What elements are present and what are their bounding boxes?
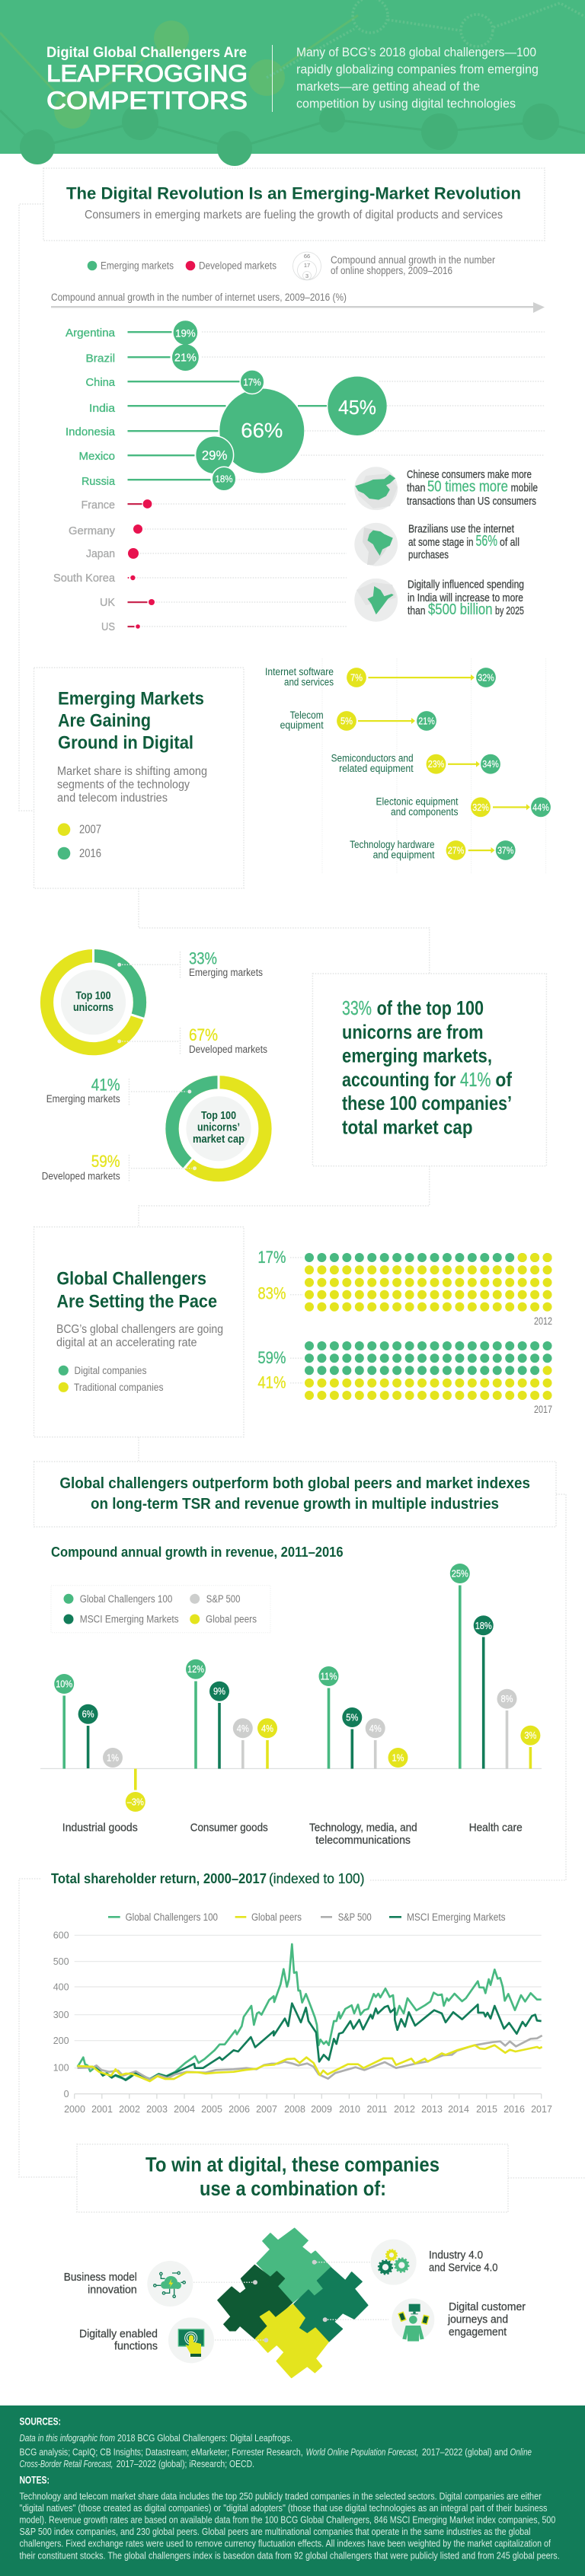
label: market cap developed 59% (42, 1152, 120, 1182)
x-axis labels: 2006 (229, 2104, 250, 2115)
legend: markets: Compound annual growth in the number (331, 254, 495, 266)
emerging country labels: India (89, 402, 116, 415)
legend: markets: 17 (304, 262, 310, 269)
y-axis labels (53, 1930, 69, 2099)
emerging country labels: China (85, 376, 116, 389)
label: unicorns developed 67% (189, 1025, 267, 1055)
donut chart: unicorns market cap (129, 1063, 284, 1194)
panel: outperform heading (34, 1462, 556, 1527)
legend: company types: Traditional companies (74, 1382, 164, 1393)
row: electronic equipment: 44% (532, 802, 549, 813)
row: semiconductors: Semiconductors and (331, 753, 414, 764)
row: electronic equipment: Electonic equipment (376, 796, 459, 808)
group: technology media telecom: Technology, media, and (309, 1822, 417, 1835)
icon: person with devices (392, 2298, 434, 2342)
group: industrial goods: 10% (56, 1679, 72, 1690)
header background network (0, 0, 585, 166)
callout: digital customer journeys (323, 2298, 526, 2342)
panel: emerging markets gaining ground (34, 668, 244, 888)
description: segments of the technology (57, 779, 190, 792)
legend: revenue growth: Global peers (206, 1614, 257, 1625)
label: unicorns developed 67%: Developed markets (189, 1044, 267, 1055)
x-axis labels: 2007 (256, 2104, 277, 2115)
emerging country labels: Argentina (66, 327, 116, 340)
callout: business model innovation (64, 2261, 257, 2307)
puzzle piece: yellow (256, 2304, 328, 2377)
group: health care: 3% (524, 1730, 536, 1741)
x-axis labels: 2009 (311, 2104, 332, 2115)
dot chart: 2012 (257, 1248, 552, 1327)
description (57, 765, 207, 805)
donut chart: top 100 unicorns: unicorns (73, 1002, 113, 1014)
label: market cap emerging 41%: Emerging markets (46, 1093, 120, 1105)
panel: unicorn statement: total market cap (342, 1115, 472, 1138)
callout: digital customer journeys: engagement (449, 2326, 507, 2338)
row: technology hardware: Technology hardware (350, 839, 435, 850)
emerging country labels: Brazil (85, 352, 115, 365)
emerging country labels: Indonesia (66, 426, 116, 438)
legend: revenue growth: MSCI Emerging Markets (80, 1614, 179, 1625)
group: consumer goods: 4% (237, 1723, 249, 1734)
row: telecom equipment: Telecom (290, 709, 324, 721)
panel: unicorn statement: these 100 companies’ (342, 1092, 512, 1114)
group: consumer goods: Consumer goods (190, 1822, 268, 1835)
sources: SOURCES: (20, 2416, 61, 2428)
callout: digitally enabled functions (79, 2317, 268, 2363)
row: technology hardware: and equipment (373, 850, 435, 861)
puzzle piece: medium green (294, 2268, 368, 2342)
axis arrow: internet user growth: Compound annual growth in the number of internet users, 2009–2016 (%) (51, 292, 347, 303)
group: technology media telecom (309, 1666, 417, 1847)
x-axis labels: 2016 (503, 2104, 525, 2115)
panel: global challengers pace: Are Setting the Pace (56, 1292, 217, 1312)
panel: combination heading (77, 2144, 508, 2212)
x-axis labels: 2005 (201, 2104, 222, 2115)
developed country labels: South Korea (53, 572, 116, 585)
legend: markets (88, 252, 495, 280)
heading: Emerging Markets (58, 689, 204, 709)
group: industrial goods (54, 1674, 145, 1835)
panel: combination heading: use a combination of: (200, 2177, 386, 2200)
callout: Brazil purchases (354, 523, 519, 566)
y-axis labels: 100 (53, 2063, 69, 2074)
label: unicorns emerging 33%: Emerging markets (189, 967, 263, 978)
heading: Are Gaining (58, 711, 151, 732)
label: market cap developed 59%: Developed markets (42, 1171, 120, 1182)
callout: Brazil purchases: at some stage in (408, 537, 474, 549)
sources (20, 2416, 532, 2469)
callout: India spending: Digitally influenced spending (408, 579, 524, 591)
legend: years: 2016 (79, 847, 101, 860)
callout: digitally enabled functions: functions (114, 2341, 158, 2353)
lollipop chart: revenue growth (40, 1564, 542, 1847)
sources: 2018 BCG Global Challengers: Digital Leapfrogs. (117, 2432, 292, 2444)
panel: unicorn statement (312, 974, 546, 1166)
sources: Cross-Border Retail Forecast, (20, 2458, 113, 2469)
group: technology media telecom: 5% (346, 1713, 358, 1723)
icon: gears (371, 2240, 417, 2285)
dot chart: 2012: 83% (257, 1284, 286, 1303)
data lines (78, 1944, 542, 2081)
header banner (0, 0, 585, 166)
sources: Data in this infographic from (20, 2432, 115, 2444)
legend: markets: 66 (304, 253, 310, 260)
callout: digitally enabled functions: Digitally enabled (79, 2328, 158, 2340)
emerging market lines (128, 331, 327, 480)
callout: India spending: in India will increase to more (408, 592, 523, 604)
callout: digital customer journeys: journeys and (447, 2314, 508, 2326)
developed country labels (53, 499, 116, 633)
panel: global challengers pace: Global Challengers (56, 1268, 206, 1289)
callout: Brazil purchases: Brazilians use the internet (408, 524, 514, 536)
x-axis labels: 2008 (284, 2104, 305, 2115)
puzzle piece: light green (257, 2228, 331, 2302)
panel: digital revolution heading (43, 168, 545, 241)
legend: markets: Emerging markets (101, 260, 174, 271)
header title: LEAPFROGGING (46, 59, 248, 87)
puzzle piece: dark green (218, 2265, 292, 2338)
panel: unicorn statement: 41% (460, 1068, 491, 1091)
row: semiconductors: related equipment (339, 763, 414, 774)
heading: total shareholder return: (indexed to 100) (269, 1870, 364, 1886)
callout: India spending: than (408, 605, 425, 617)
developed country labels: US (101, 620, 115, 633)
callout: India spending: $500 billion (428, 601, 492, 618)
row: internet software: 32% (478, 673, 494, 684)
label: unicorns developed 67%: 67% (189, 1025, 218, 1044)
donut chart: top 100 unicorns (47, 947, 180, 1055)
legend: company types (59, 1365, 164, 1393)
x-axis labels: 2001 (91, 2104, 113, 2115)
heading: revenue growth: Compound annual growth in revenue, 2011–2016 (51, 1544, 344, 1560)
legend: shareholder return: MSCI Emerging Markets (407, 1911, 506, 1923)
group: industrial goods: 6% (82, 1709, 94, 1720)
group: technology media telecom: 11% (320, 1672, 337, 1682)
connectors (19, 204, 585, 2178)
callout: Brazil purchases: of all (500, 537, 519, 549)
panel: outperform heading: on long-term TSR and revenue growth in multiple industries (91, 1495, 499, 1513)
legend: shareholder return: Global peers (251, 1911, 302, 1923)
header title (46, 45, 248, 114)
bubble values: 17% (243, 377, 261, 388)
emerging country labels (66, 327, 116, 488)
developed country labels: France (81, 499, 115, 512)
x-axis labels (64, 2104, 552, 2115)
group: health care: 8% (501, 1694, 513, 1704)
callout: India spending: by 2025 (495, 605, 524, 617)
legend: years (58, 823, 101, 860)
legend: shareholder return: Global Challengers 100 (126, 1911, 218, 1923)
bubble values (174, 327, 376, 484)
row: internet software: Internet software (265, 666, 334, 677)
dot chart: 2017: 2017 (534, 1404, 552, 1415)
sources: 2017–2022 (global); iResearch; OECD. (117, 2458, 254, 2469)
group: health care (450, 1564, 540, 1835)
row: semiconductors (331, 753, 500, 774)
legend: revenue growth (51, 1586, 270, 1633)
group: consumer goods: 9% (213, 1686, 225, 1697)
x-axis labels: 2014 (448, 2104, 469, 2115)
row: internet software: and services (284, 677, 334, 688)
bubble values: 66% (241, 419, 283, 442)
donut chart: unicorns market cap: unicorns’ (197, 1122, 240, 1134)
callout: China mobile transactions: 50 times more (427, 479, 508, 496)
chart axes (75, 1935, 542, 2099)
legend: markets: of online shoppers, 2009–2016 (331, 265, 452, 276)
y-axis labels: 600 (53, 1930, 69, 1940)
dot chart: 2017: 41% (257, 1372, 286, 1392)
panel: unicorn statement: of the top 100 (377, 996, 484, 1019)
legend: markets: 3 (305, 273, 308, 279)
row: electronic equipment: and components (391, 806, 459, 818)
panel: outperform heading: Global challengers outperform both global peers and market indexes (59, 1475, 530, 1492)
developed country labels: Japan (86, 547, 115, 560)
header intro text: markets—are getting ahead of the (296, 80, 480, 94)
dot chart: 2012: 17% (257, 1248, 286, 1267)
label: market cap developed 59%: 59% (91, 1152, 120, 1171)
panel: combination heading: To win at digital, these companies (145, 2154, 440, 2176)
sources: 2017–2022 (global) and (422, 2446, 508, 2457)
callout: industry 4.0: and Service 4.0 (429, 2262, 498, 2275)
sources: Online (510, 2446, 532, 2457)
row: technology hardware: 27% (448, 845, 464, 856)
header title: Digital Global Challengers Are (46, 45, 247, 61)
callout: China mobile transactions: than (407, 483, 425, 495)
callout: business model innovation: innovation (88, 2284, 137, 2297)
bubble values: 29% (202, 448, 227, 463)
label: market cap emerging 41%: 41% (91, 1076, 120, 1095)
callout: China mobile transactions (354, 467, 538, 510)
donut chart: top 100 unicorns: Top 100 (76, 990, 111, 1003)
notes (20, 2475, 560, 2561)
group: consumer goods (186, 1659, 277, 1835)
group: technology media telecom: telecommunications (315, 1835, 411, 1847)
callout: China mobile transactions: transactions than US consumers (407, 496, 536, 508)
panel: unicorn statement: emerging markets, (342, 1044, 492, 1067)
bubble values: 45% (338, 397, 376, 419)
panel: global challengers pace: BCG’s global challengers are going (56, 1323, 223, 1336)
row: internet software (265, 666, 496, 688)
dot chart: 2012: 2012 (534, 1315, 552, 1327)
group: consumer goods: 4% (261, 1723, 273, 1734)
heading (58, 689, 204, 754)
x-axis labels: 2017 (531, 2104, 552, 2115)
sources: World Online Population Forecast, (306, 2446, 419, 2457)
row: telecom equipment: 5% (340, 716, 353, 726)
chart: market share by segment (265, 658, 551, 874)
y-axis labels: 300 (53, 2010, 69, 2020)
group: health care: Health care (469, 1822, 523, 1835)
callout: China mobile transactions: mobile (511, 483, 538, 495)
x-axis labels: 2012 (394, 2104, 415, 2115)
callout: India spending (354, 579, 524, 622)
x-axis labels: 2015 (476, 2104, 497, 2115)
group: industrial goods: –3% (127, 1797, 144, 1807)
description: and telecom industries (57, 792, 168, 805)
emerging country labels: Russia (82, 475, 116, 488)
row: semiconductors: 23% (428, 759, 444, 770)
group: health care: 18% (475, 1621, 492, 1631)
row: electronic equipment (376, 796, 551, 818)
header intro text: rapidly globalizing companies from emerging (296, 63, 539, 77)
callout: industry 4.0 (312, 2240, 498, 2285)
bubbles (172, 320, 387, 491)
legend: shareholder return (108, 1911, 506, 1923)
bubble values: 18% (215, 473, 233, 484)
heading: Ground in Digital (58, 733, 193, 754)
group: industrial goods: 1% (107, 1752, 119, 1763)
icon: Brazil map (354, 523, 398, 566)
row: electronic equipment: 32% (472, 802, 489, 813)
icon: cloud circuit (147, 2261, 193, 2307)
notes: NOTES: (20, 2475, 50, 2486)
legend: company types: Digital companies (75, 1365, 147, 1376)
legend: markets: Developed markets (199, 260, 277, 271)
icon: India map (354, 579, 398, 622)
bubble chart: countries (53, 320, 545, 633)
heading: total shareholder return: Total shareholder return, 2000–2017 (51, 1870, 267, 1886)
bubble values: 19% (175, 327, 196, 339)
label: unicorns emerging 33% (189, 949, 263, 978)
label: market cap emerging 41% (46, 1076, 120, 1105)
callout: business model innovation: Business model (64, 2272, 137, 2284)
group: consumer goods: 12% (187, 1664, 204, 1675)
icon: tablet touch (168, 2317, 214, 2363)
x-axis labels: 2000 (64, 2104, 85, 2115)
panel: digital revolution heading: Consumers in emerging markets are fueling the growth of digital products and services (85, 209, 503, 222)
header intro text: competition by using digital technologies (296, 97, 516, 110)
legend: shareholder return: S&P 500 (338, 1911, 372, 1923)
dot chart: 2017: 59% (257, 1348, 286, 1367)
emerging country labels: Mexico (79, 450, 115, 463)
row: telecom equipment: equipment (280, 719, 324, 731)
axis arrow: internet user growth (51, 292, 545, 313)
group: technology media telecom: 1% (392, 1752, 404, 1763)
callout: industry 4.0: Industry 4.0 (429, 2249, 483, 2262)
bubble values: 21% (174, 352, 197, 365)
panel: unicorn statement: accounting for (342, 1068, 456, 1091)
donut chart: unicorns market cap: Top 100 (201, 1110, 236, 1122)
row: telecom equipment: 21% (418, 716, 435, 726)
row: telecom equipment (280, 709, 436, 731)
x-axis labels: 2002 (119, 2104, 140, 2115)
icon: China map (354, 467, 398, 510)
callout: digital customer journeys: Digital customer (449, 2301, 526, 2313)
y-axis labels: 0 (64, 2089, 69, 2099)
developed market dots (128, 499, 155, 629)
x-axis labels: 2013 (421, 2104, 443, 2115)
y-axis labels: 400 (53, 1982, 69, 1993)
group: health care: 25% (452, 1568, 468, 1579)
line chart: shareholder return (53, 1930, 552, 2115)
description: Market share is shifting among (57, 765, 207, 778)
x-axis labels: 2010 (339, 2104, 360, 2115)
panel: global challengers pace (34, 1227, 244, 1437)
x-axis labels: 2011 (367, 2104, 387, 2115)
x-axis labels: 2004 (174, 2104, 195, 2115)
footer: sources and notes (0, 2405, 585, 2576)
x-axis labels: 2003 (146, 2104, 168, 2115)
y-axis labels: 200 (53, 2036, 69, 2046)
panel: digital revolution heading: The Digital Revolution Is an Emerging-Market Revolution (66, 184, 521, 203)
row: technology hardware (350, 839, 516, 861)
y-axis labels: 500 (53, 1956, 69, 1967)
sources: BCG analysis; CapIQ; CB Insights; Datastream; eMarketer; Forrester Research, (20, 2446, 303, 2457)
developed country labels: UK (100, 596, 115, 609)
group: industrial goods: Industrial goods (62, 1822, 138, 1835)
label: unicorns emerging 33%: 33% (189, 949, 217, 968)
dot chart: 2017 (257, 1341, 552, 1415)
row: internet software: 7% (350, 673, 363, 684)
panel: unicorn statement: 33% (342, 996, 372, 1019)
panel: global challengers pace: digital at an accelerating rate (56, 1336, 197, 1349)
legend: years: 2007 (79, 824, 101, 836)
header intro text (296, 46, 539, 110)
group: technology media telecom: 4% (369, 1723, 382, 1734)
developed country labels: Germany (69, 524, 115, 537)
dotted row guides (137, 332, 545, 626)
row: semiconductors: 34% (482, 759, 499, 770)
callout: China mobile transactions: Chinese consumers make more (407, 469, 532, 481)
donut chart: unicorns market cap: market cap (193, 1133, 245, 1146)
panel: unicorn statement: of (495, 1068, 512, 1091)
header title: COMPETITORS (46, 87, 248, 114)
row: technology hardware: 37% (497, 845, 513, 856)
legend: revenue growth: Global Challengers 100 (80, 1593, 172, 1605)
callout: Brazil purchases: 56% (475, 533, 497, 550)
legend: revenue growth: S&P 500 (206, 1593, 240, 1605)
callout: Brazil purchases: purchases (408, 550, 449, 562)
panel: unicorn statement: unicorns are from (342, 1021, 484, 1044)
puzzle diagram (218, 2228, 368, 2377)
header intro text: Many of BCG’s 2018 global challengers—100 (296, 46, 536, 59)
